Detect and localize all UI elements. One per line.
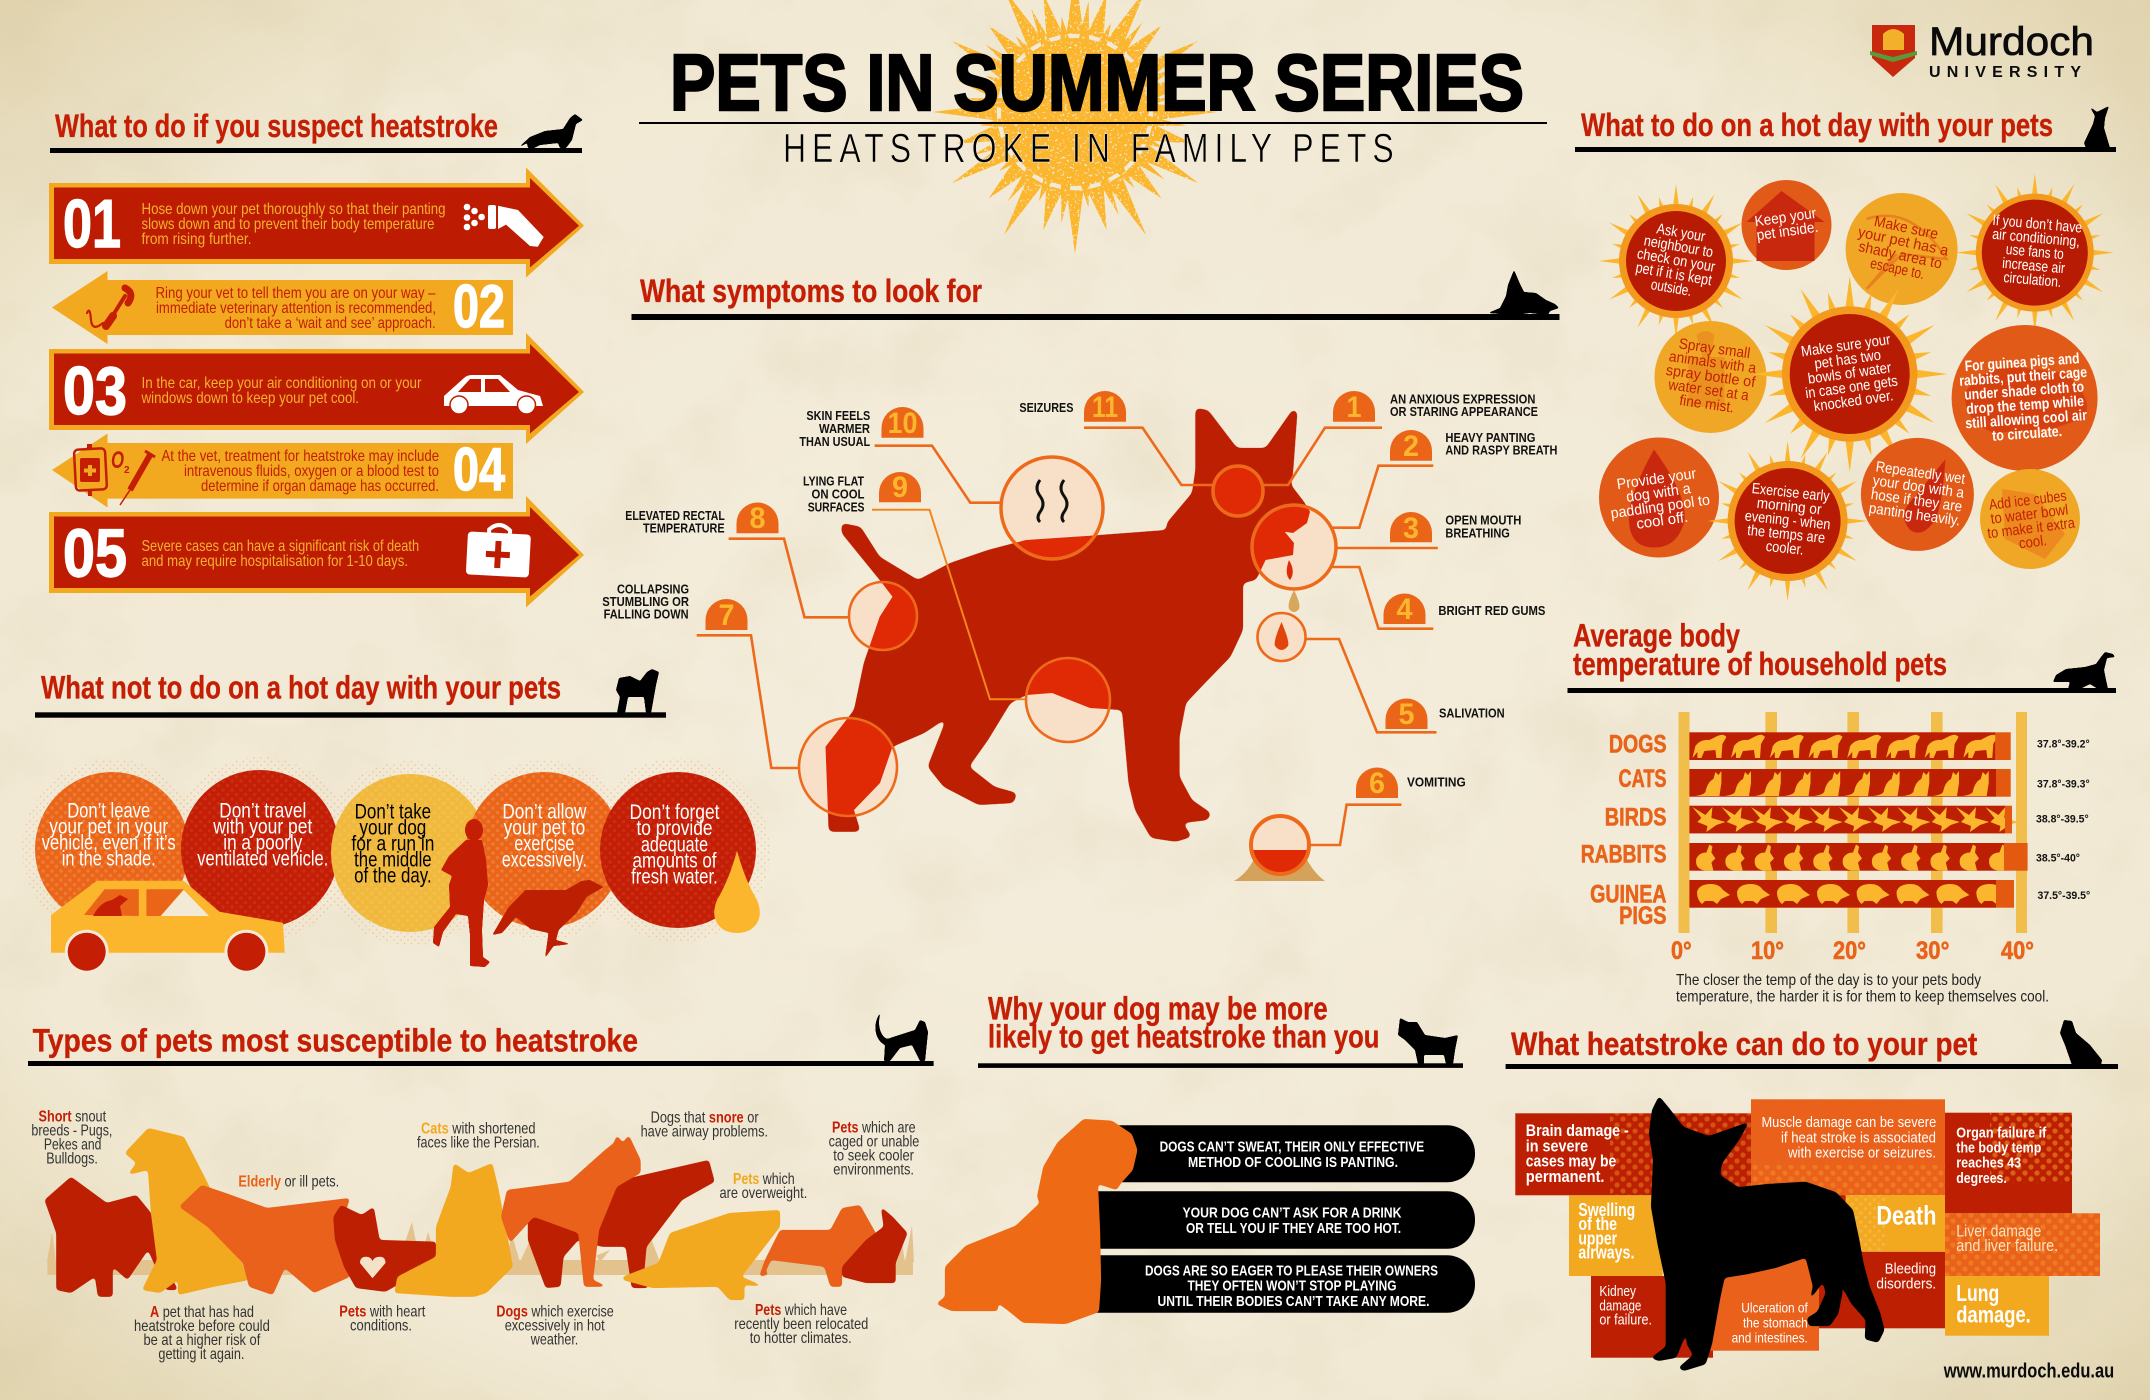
tip: fans bbox=[1956, 174, 2114, 332]
tip: exercise early: cooler. bbox=[1765, 538, 1805, 559]
captions: susceptible pets: have airway problems. bbox=[641, 1124, 768, 1141]
symptom labels: AN ANXIOUS EXPRESSION bbox=[1390, 391, 1535, 406]
symptom labels: ON COOL bbox=[812, 487, 865, 502]
logo: Murdoch University: Murdoch bbox=[1929, 20, 2094, 64]
icon: yellow car bbox=[51, 881, 285, 974]
symptom labels bbox=[602, 391, 1557, 790]
panel: why your dog may be more likely bbox=[936, 990, 1475, 1324]
tip: two bowls: knocked over. bbox=[1813, 387, 1894, 415]
tip: ask your neighbour bbox=[1599, 184, 1753, 338]
heading: why your dog: Why your dog may be more bbox=[988, 990, 1328, 1026]
heading: temperature: Average body bbox=[1573, 618, 1740, 654]
tip: exercise early: Exercise early bbox=[1751, 480, 1831, 505]
symptom labels: HEAVY PANTING bbox=[1445, 430, 1535, 445]
tip: spray: Spray small bbox=[1678, 335, 1751, 362]
magnifier circle: skin bbox=[999, 455, 1105, 561]
tip: exercise early: the temps are bbox=[1747, 522, 1826, 547]
text: leave in vehicle: vehicle, even if it’s bbox=[42, 831, 176, 854]
tip: spray: water set at a bbox=[1666, 376, 1750, 405]
tip: two bowls: Make sure your bbox=[1800, 331, 1891, 360]
tip: shady area: your pet has a bbox=[1856, 224, 1951, 260]
captions: susceptible pets: to hotter climates. bbox=[750, 1330, 852, 1347]
row labels: PIGS bbox=[1619, 902, 1666, 930]
orange dog silhouette bbox=[936, 1119, 1137, 1324]
step 01 arrow: slows down and to prevent their body temperature bbox=[142, 216, 435, 233]
tip: wet your dog bbox=[1861, 438, 1974, 551]
circle: leave in vehicle bbox=[35, 772, 189, 926]
effects text: or failure. bbox=[1599, 1311, 1652, 1328]
captions: susceptible pets: excessively in hot bbox=[505, 1318, 605, 1335]
effects text: upper bbox=[1578, 1228, 1617, 1248]
chart note: temperature, the harder it is for them to keep themselves cool. bbox=[1676, 989, 2049, 1006]
circle: exercise bbox=[466, 772, 622, 928]
symptom labels: TEMPERATURE bbox=[643, 521, 725, 536]
heading: what not to do: What not to do on a hot day with your pets bbox=[41, 669, 561, 705]
captions: susceptible pets: Pets with heart bbox=[339, 1304, 426, 1321]
tip: wet your dog: hose if they are bbox=[1870, 486, 1963, 516]
step 02 arrow bbox=[52, 271, 513, 344]
axis labels: 20° bbox=[1833, 937, 1866, 965]
black reason bars: METHOD OF COOLING IS PANTING. bbox=[1188, 1154, 1398, 1171]
effects text: damage bbox=[1599, 1297, 1641, 1314]
panel: what symptoms to look for bbox=[602, 270, 1560, 881]
step 03 arrow: In the car, keep your air conditioning on or your bbox=[142, 375, 422, 392]
badge numbers: 10 bbox=[888, 407, 918, 440]
circle: fresh water bbox=[600, 772, 756, 928]
magnifier circle: salivation bbox=[1258, 613, 1306, 661]
tip: spray bbox=[1654, 321, 1766, 433]
badge numbers bbox=[718, 391, 1419, 800]
captions: susceptible pets: Bulldogs. bbox=[46, 1151, 98, 1168]
circle: poorly ventilated bbox=[181, 770, 339, 928]
captions: susceptible pets: conditions. bbox=[350, 1318, 412, 1335]
heading: what heatstroke can do bbox=[1506, 1020, 2118, 1069]
title bbox=[639, 38, 1547, 171]
captions: susceptible pets: Elderly or ill pets. bbox=[238, 1174, 339, 1191]
text: fresh water: Don’t forget bbox=[630, 801, 720, 824]
step 03 arrow: 03 bbox=[63, 353, 127, 429]
step 05 arrow: Severe cases can have a significant risk of death bbox=[142, 538, 419, 555]
tip: guinea pigs and rabbits: rabbits, put their cage bbox=[1959, 364, 2088, 390]
colour blocks bbox=[1515, 1099, 2100, 1358]
effects text: airways. bbox=[1578, 1243, 1634, 1263]
panel: what to do if you suspect heatstroke bbox=[49, 108, 584, 608]
step 04 arrow: intravenous fluids, oxygen or a blood test to bbox=[184, 463, 439, 480]
tip: shady area: shady area to bbox=[1857, 238, 1944, 273]
tip: ask your neighbour: Ask your bbox=[1655, 220, 1707, 246]
tip: guinea pigs and rabbits: to circulate. bbox=[1992, 423, 2063, 445]
step 04 arrow: At the vet, treatment for heatstroke may include bbox=[162, 448, 439, 465]
text: poorly ventilated bbox=[197, 799, 328, 871]
chart note: The closer the temp of the day is to your pets body bbox=[1676, 972, 1981, 989]
effects text: in severe bbox=[1526, 1136, 1588, 1155]
effects text: Lung bbox=[1956, 1280, 1999, 1306]
tip: ice cubes: to water bowl bbox=[1990, 501, 2069, 528]
captions: susceptible pets: Pekes and bbox=[44, 1137, 101, 1154]
range values: 38.5°-40° bbox=[2036, 852, 2080, 864]
step 04 arrow: 2 bbox=[124, 465, 130, 476]
text: fresh water bbox=[630, 801, 720, 888]
logo: Murdoch University bbox=[1870, 20, 2094, 81]
text: exercise: Don’t allow bbox=[502, 800, 587, 823]
step 02 arrow: don’t take a ‘wait and see’ approach. bbox=[225, 315, 436, 332]
symptom labels: BREATHING bbox=[1445, 525, 1510, 540]
tip: ice cubes: Add ice cubes bbox=[1988, 487, 2067, 514]
captions: susceptible pets: environments. bbox=[833, 1161, 914, 1178]
effects text: cases may be bbox=[1526, 1152, 1616, 1171]
tip: spray: spray bottle of bbox=[1665, 362, 1757, 391]
step 02 arrow: Ring your vet to tell them you are on your way – bbox=[156, 285, 436, 302]
heading: suspect heatstroke: What to do if you suspect heatstroke bbox=[55, 108, 498, 144]
panel: average body temperature bbox=[1568, 618, 2116, 1006]
captions: susceptible pets: Short snout bbox=[38, 1109, 107, 1126]
step 01 arrow: from rising further. bbox=[142, 231, 252, 248]
pet silhouettes bbox=[44, 1128, 908, 1300]
tip: fans: circulation. bbox=[2003, 269, 2062, 291]
magnifier circle: cool surfaces bbox=[1024, 656, 1112, 744]
effects text: Bleeding bbox=[1885, 1260, 1936, 1277]
effects text bbox=[1526, 1114, 2058, 1346]
row labels: CATS bbox=[1618, 765, 1666, 793]
captions: susceptible pets: heatstroke before could bbox=[134, 1318, 270, 1335]
captions: susceptible pets: recently been relocated bbox=[734, 1316, 868, 1333]
step 02 arrow: 02 bbox=[453, 273, 505, 340]
text: exercise: exercise bbox=[514, 832, 574, 855]
badge numbers: 5 bbox=[1398, 698, 1414, 731]
captions: susceptible pets: faces like the Persian. bbox=[417, 1134, 540, 1151]
symptom labels: LYING FLAT bbox=[803, 474, 864, 489]
black reason bars: DOGS CAN’T SWEAT, THEIR ONLY EFFECTIVE bbox=[1160, 1139, 1424, 1156]
tip: ask your neighbour: pet if it is kept bbox=[1634, 259, 1714, 289]
tip: paddling pool: cool off. bbox=[1635, 509, 1689, 533]
black reason bars: YOUR DOG CAN’T ASK FOR A DRINK bbox=[1182, 1204, 1402, 1221]
text: run in the day: for a run in bbox=[351, 832, 434, 855]
range values: 37.8°-39.3° bbox=[2037, 778, 2090, 790]
axis labels bbox=[1671, 937, 2034, 965]
dotted halo bbox=[22, 757, 770, 945]
symptom labels: STUMBLING OR bbox=[602, 594, 690, 609]
step 05 arrow: and may require hospitalisation for 1-10 days. bbox=[142, 553, 408, 570]
text: poorly ventilated: with your pet bbox=[212, 815, 312, 838]
icon: runner bbox=[433, 819, 490, 967]
tip: guinea pigs and rabbits: drop the temp while bbox=[1966, 393, 2085, 418]
step 04 arrow: 04 bbox=[453, 436, 505, 503]
badge numbers: 1 bbox=[1346, 391, 1362, 424]
tip: fans: air conditioning, bbox=[1991, 226, 2081, 250]
row labels: GUINEA bbox=[1590, 881, 1666, 909]
tip: fans: use fans to bbox=[2005, 241, 2064, 263]
heading: symptoms bbox=[632, 270, 1560, 320]
symptom labels: OPEN MOUTH bbox=[1445, 513, 1521, 528]
captions: susceptible pets: to seek cooler bbox=[833, 1147, 915, 1164]
chart note bbox=[1676, 972, 2049, 1006]
captions: susceptible pets: Pets which bbox=[733, 1171, 795, 1188]
text: leave in vehicle: in the shade. bbox=[62, 848, 156, 871]
symptom labels: VOMITING bbox=[1407, 775, 1466, 790]
symptom labels: SEIZURES bbox=[1019, 400, 1074, 415]
effects text: permanent. bbox=[1526, 1167, 1604, 1186]
captions: susceptible pets: Cats with shortened bbox=[421, 1120, 536, 1137]
step 04 arrow: determine if organ damage has occurred. bbox=[201, 478, 439, 495]
tip: ask your neighbour: outside. bbox=[1650, 276, 1693, 300]
tip: shady area: escape to. bbox=[1869, 255, 1926, 283]
step 01 arrow: Hose down your pet thoroughly so that their panting bbox=[142, 201, 446, 218]
step 02 arrow: immediate veterinary attention is recommended, bbox=[156, 300, 436, 317]
leader lines bbox=[697, 428, 1438, 845]
badge numbers: 7 bbox=[718, 599, 734, 632]
heading: why your dog bbox=[978, 990, 1463, 1068]
captions: susceptible pets: caged or unable bbox=[829, 1133, 919, 1150]
black reason bars: OR TELL YOU IF THEY ARE TOO HOT. bbox=[1186, 1220, 1401, 1237]
text: run in the day: of the day. bbox=[354, 864, 432, 887]
row labels bbox=[1581, 731, 1666, 930]
range values: 38.8°-39.5° bbox=[2036, 814, 2089, 826]
tip: fans: If you don’t have bbox=[1992, 212, 2083, 237]
bar chart: temperature ranges bbox=[1678, 712, 2028, 933]
badge numbers: 3 bbox=[1403, 512, 1419, 545]
tip: wet your dog: your dog with a bbox=[1872, 472, 1966, 502]
badge numbers: 6 bbox=[1369, 767, 1385, 800]
captions: susceptible pets: Pets which are bbox=[832, 1119, 916, 1136]
effects text: Brain damage - bbox=[1526, 1121, 1629, 1140]
panel: what to do on a hot day bbox=[1575, 106, 2116, 601]
effects text: Death bbox=[1876, 1200, 1936, 1230]
magnifier circle: mouth bbox=[1250, 503, 1338, 591]
text: exercise: your pet to bbox=[504, 816, 585, 839]
title: PETS IN SUMMER SERIES bbox=[670, 38, 1524, 127]
tip: guinea pigs and rabbits: still allowing cool air bbox=[1965, 407, 2088, 432]
sun burst behind title bbox=[933, 0, 1217, 254]
logo: Murdoch University: UNIVERSITY bbox=[1929, 64, 2081, 81]
website url: www.murdoch.edu.au bbox=[1943, 1361, 2114, 1383]
tip: exercise early bbox=[1708, 441, 1868, 601]
captions: susceptible pets: getting it again. bbox=[158, 1346, 244, 1363]
badge numbers: 8 bbox=[750, 502, 766, 535]
numbered badges bbox=[706, 391, 1432, 798]
tip: ice cubes: to make it extra bbox=[1986, 515, 2076, 542]
black reason bars: UNTIL THEIR BODIES CAN’T TAKE ANY MORE. bbox=[1158, 1293, 1430, 1310]
heading: temperature: temperature of household pets bbox=[1573, 646, 1947, 682]
symptom labels: OR STARING APPEARANCE bbox=[1390, 404, 1538, 419]
text: run in the day: your dog bbox=[359, 816, 426, 839]
effects text: the body temp bbox=[1956, 1140, 2041, 1157]
symptom labels: ELEVATED RECTAL bbox=[625, 508, 725, 523]
tip: paddling pool: Provide your bbox=[1616, 465, 1697, 493]
symptom labels: BRIGHT RED GUMS bbox=[1438, 603, 1546, 618]
tip: ask your neighbour: neighbour to bbox=[1643, 232, 1714, 261]
text: poorly ventilated: Don’t travel bbox=[219, 799, 306, 822]
captions: susceptible pets: A pet that has had bbox=[150, 1304, 254, 1321]
effects text: and liver failure. bbox=[1956, 1236, 2058, 1255]
text: fresh water: adequate bbox=[641, 833, 708, 856]
captions: susceptible pets: weather. bbox=[530, 1332, 578, 1349]
captions: susceptible pets: breeds - Pugs, bbox=[31, 1123, 112, 1140]
step 03 arrow: windows down to keep your pet cool. bbox=[141, 390, 359, 407]
badge numbers: 9 bbox=[892, 471, 908, 504]
black reason bars: DOGS ARE SO EAGER TO PLEASE THEIR OWNERS bbox=[1145, 1262, 1438, 1279]
text: fresh water: fresh water. bbox=[631, 865, 718, 888]
grass band bbox=[47, 1222, 914, 1275]
black reason bars: THEY OFTEN WON’T STOP PLAYING bbox=[1188, 1278, 1396, 1295]
black dog silhouette bbox=[1649, 1096, 1884, 1371]
symptom labels: SKIN FEELS bbox=[806, 408, 870, 423]
effects text: if heat stroke is associated bbox=[1781, 1129, 1936, 1146]
heading: temperature bbox=[1568, 618, 2116, 693]
text: leave in vehicle: Don’t leave bbox=[67, 799, 150, 822]
tip: paddling pool bbox=[1599, 438, 1719, 558]
effects text: Muscle damage can be severe bbox=[1762, 1114, 1936, 1131]
tip: exercise early: evening - when bbox=[1744, 508, 1831, 533]
heading: what heatstroke can do: What heatstroke can do to your pet bbox=[1511, 1026, 1978, 1062]
symptom labels: THAN USUAL bbox=[799, 434, 870, 449]
badge numbers: 2 bbox=[1403, 430, 1419, 463]
range values: 37.5°-39.5° bbox=[2038, 890, 2090, 902]
tip: shady area: Make sure bbox=[1873, 213, 1940, 243]
captions: susceptible pets: Dogs which exercise bbox=[496, 1304, 614, 1321]
symptom labels: COLLAPSING bbox=[617, 581, 689, 596]
text: fresh water: to provide bbox=[636, 817, 712, 840]
effects text: Organ failure if bbox=[1956, 1124, 2047, 1141]
effects text: with exercise or seizures. bbox=[1787, 1145, 1936, 1162]
captions: susceptible pets: be at a higher risk of bbox=[144, 1332, 261, 1349]
effects text: Kidney bbox=[1599, 1283, 1636, 1300]
magnifier circle: seizures bbox=[1213, 466, 1263, 516]
tip: ice cubes: cool. bbox=[2018, 532, 2048, 552]
tip: wet your dog: panting heavily. bbox=[1868, 500, 1961, 530]
symptom labels: SALIVATION bbox=[1439, 706, 1505, 721]
heading: types of pets: Types of pets most susceptible to heatstroke bbox=[33, 1023, 638, 1059]
tip: wet your dog: Repeatedly wet bbox=[1875, 458, 1967, 488]
axis labels: 0° bbox=[1671, 937, 1692, 965]
text: fresh water: amounts of bbox=[632, 849, 717, 872]
tip: shady area bbox=[1846, 193, 1958, 305]
icon: running dog bbox=[492, 880, 604, 958]
tip: ask your neighbour: check on your bbox=[1636, 245, 1716, 276]
step 04 arrow bbox=[52, 434, 513, 508]
tip: exercise early: morning or bbox=[1756, 495, 1822, 518]
saliva drop bbox=[1289, 590, 1299, 612]
dog silhouette bbox=[826, 408, 1310, 842]
range values: 37.8°-39.2° bbox=[2037, 739, 2090, 751]
text: exercise bbox=[502, 800, 587, 871]
badge numbers: 4 bbox=[1396, 593, 1413, 626]
text: leave in vehicle: your pet in your bbox=[49, 815, 168, 838]
effects text: the stomach bbox=[1743, 1315, 1808, 1331]
tip: ice cubes bbox=[1980, 469, 2080, 569]
text: exercise: excessively. bbox=[502, 848, 587, 871]
panel: what heatstroke can do to your pet bbox=[1506, 1020, 2118, 1371]
tip: keep pet inside: pet inside. bbox=[1756, 219, 1819, 244]
tip: spray: animals with a bbox=[1668, 348, 1758, 377]
tip: two bowls: in case one gets bbox=[1804, 372, 1899, 402]
effects text: Swelling bbox=[1578, 1200, 1635, 1220]
effects text: degrees. bbox=[1956, 1170, 2007, 1187]
magnifier circle: collapsing bbox=[798, 716, 898, 818]
text: run in the day: the middle bbox=[354, 848, 432, 871]
axis labels: 10° bbox=[1751, 937, 1784, 965]
row labels: BIRDS bbox=[1605, 804, 1666, 832]
symptom labels: FALLING DOWN bbox=[604, 607, 689, 622]
row labels: RABBITS bbox=[1581, 841, 1666, 869]
heading: types of pets bbox=[28, 1013, 934, 1066]
row labels: DOGS bbox=[1609, 731, 1666, 759]
icon: water drop bbox=[714, 851, 760, 933]
effects text: of the bbox=[1578, 1214, 1617, 1234]
step 05 arrow bbox=[49, 496, 584, 608]
captions: susceptible pets: Dogs that snore or bbox=[651, 1110, 759, 1127]
text: run in the day bbox=[351, 800, 434, 887]
heading: why your dog: likely to get heatstroke than you bbox=[988, 1019, 1379, 1055]
black reason bars bbox=[1095, 1125, 1475, 1313]
effects text: and intestines. bbox=[1732, 1330, 1808, 1346]
effects text: disorders. bbox=[1876, 1275, 1936, 1292]
tip: two bowls: bowls of water bbox=[1807, 359, 1892, 388]
effects text: reaches 43 bbox=[1956, 1155, 2021, 1172]
symptom labels: SURFACES bbox=[808, 500, 865, 515]
tip: guinea pigs and rabbits: For guinea pigs and bbox=[1964, 350, 2080, 375]
magnifier circle: rectal temperature bbox=[848, 580, 918, 652]
symptom labels: WARMER bbox=[819, 421, 871, 436]
effects text: Liver damage bbox=[1956, 1222, 2041, 1241]
symptom labels: AND RASPY BREATH bbox=[1445, 442, 1557, 457]
tip: two bowls bbox=[1752, 276, 1948, 472]
captions: susceptible pets: Pets which have bbox=[755, 1302, 847, 1319]
captions: susceptible pets: are overweight. bbox=[720, 1185, 807, 1202]
tip: spray: fine mist. bbox=[1678, 392, 1735, 416]
text: poorly ventilated: ventilated vehicle. bbox=[197, 848, 328, 871]
tip: guinea pigs and rabbits: under shade cloth to bbox=[1964, 378, 2085, 404]
tip: two bowls: pet has two bbox=[1813, 347, 1882, 373]
badge numbers: 11 bbox=[1092, 391, 1118, 424]
step 05 arrow: 05 bbox=[63, 516, 127, 592]
panel: what not to do on a hot day bbox=[22, 669, 770, 974]
step 03 arrow bbox=[49, 333, 584, 444]
axis labels: 40° bbox=[2001, 937, 2034, 965]
panel: types of pets most susceptible bbox=[28, 1013, 934, 1363]
tip: paddling pool: paddling pool to bbox=[1610, 492, 1711, 522]
axis labels: 30° bbox=[1916, 937, 1949, 965]
step 01 arrow bbox=[49, 168, 584, 278]
effects text: Ulceration of bbox=[1741, 1299, 1808, 1315]
magnifier: vomit bowl bbox=[1234, 816, 1325, 881]
circle: run in the day bbox=[331, 774, 489, 932]
range values bbox=[2036, 739, 2090, 902]
text: run in the day: Don’t take bbox=[355, 800, 431, 823]
captions: susceptible pets bbox=[31, 1109, 919, 1363]
text: poorly ventilated: in a poorly bbox=[223, 831, 303, 854]
tip: keep pet inside bbox=[1742, 180, 1832, 270]
step 04 arrow: O bbox=[111, 447, 124, 474]
tip: guinea pigs and rabbits bbox=[1952, 325, 2098, 471]
tip: paddling pool: dog with a bbox=[1625, 480, 1692, 506]
heading: symptoms: What symptoms to look for bbox=[640, 273, 982, 309]
tip: keep pet inside: Keep your bbox=[1754, 205, 1817, 230]
title: HEATSTROKE IN FAMILY PETS bbox=[783, 125, 1394, 171]
text: leave in vehicle bbox=[42, 799, 176, 871]
effects text: damage. bbox=[1956, 1301, 2031, 1327]
step 01 arrow: 01 bbox=[63, 186, 121, 262]
tip: fans: increase air bbox=[2002, 255, 2066, 277]
